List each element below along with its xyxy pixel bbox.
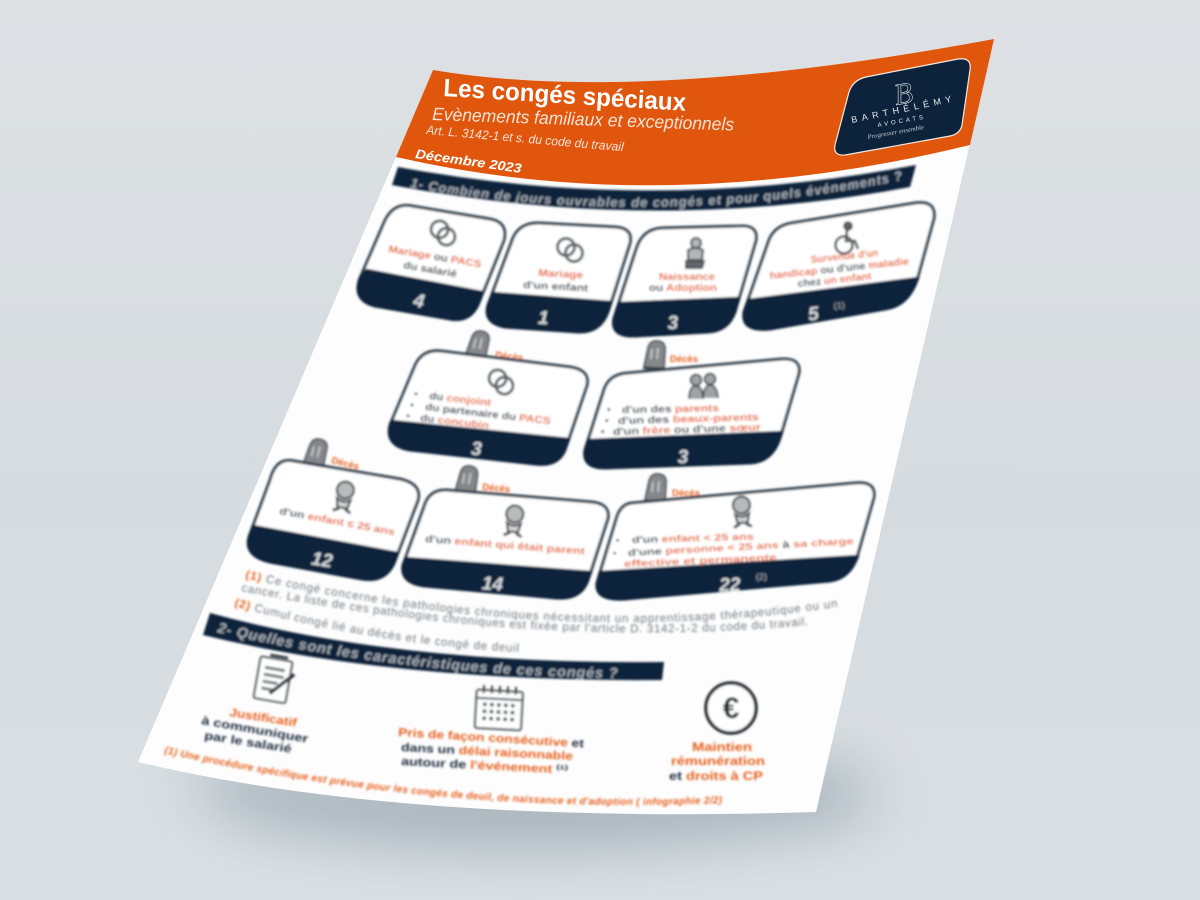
- icon: calendar: [475, 685, 523, 730]
- label: [769, 248, 910, 290]
- logo: BARTHÉLÉMY: [850, 94, 952, 125]
- label: Mariage ou PACS: [388, 244, 482, 271]
- label: du salarié: [402, 260, 458, 280]
- icon: rings: [487, 369, 515, 395]
- days: 3: [667, 313, 679, 334]
- list: d'un des beaux-parents: [618, 412, 760, 427]
- icon: rings: [558, 238, 582, 262]
- page body (soft focus): [162, 164, 938, 808]
- list: du concubin: [420, 413, 489, 432]
- label: handicap ou d'une maladie: [769, 256, 910, 282]
- list: •: [616, 535, 620, 546]
- page sheet: [138, 39, 994, 814]
- text: dans un délai raisonnable: [401, 742, 573, 763]
- icon: tombstone: [302, 437, 329, 469]
- icon: tombstone: [464, 329, 491, 361]
- text: Justificatif: [229, 707, 298, 730]
- list: [613, 532, 854, 570]
- label: Mariage: [538, 268, 584, 281]
- card: décès parents, 3: [585, 341, 799, 468]
- card: décès enfant ou personne à charge, 22: Décès: [672, 488, 700, 499]
- days: 1: [537, 308, 549, 329]
- text: et droits à CP: [669, 771, 763, 783]
- subtitle: Evènements familiaux et exceptionnels: [432, 104, 734, 135]
- days: 5: [807, 303, 820, 326]
- text: rémunération: [671, 756, 765, 768]
- logo: B: [891, 76, 915, 112]
- label: [649, 272, 717, 294]
- label: ou Adoption: [649, 283, 717, 294]
- legal reference: Art. L. 3142-1 et s. du code du travail: [425, 123, 625, 154]
- label: d'un enfant: [523, 280, 589, 294]
- card: naissance ou adoption, 3: [613, 226, 756, 336]
- list: d'une personne < 25 ans à sa charge: [628, 536, 854, 559]
- logo: AVOCATS: [877, 115, 924, 129]
- header: orange banner: [396, 39, 994, 185]
- list: du conjoint: [429, 391, 492, 409]
- days: 12: [310, 549, 334, 573]
- list: du partenaire du PACS: [425, 402, 551, 427]
- prise de congé column: [398, 685, 584, 777]
- card: mariage ou PACS du salarié, 4: [358, 205, 505, 320]
- footnotes: cancer. La liste de ces pathologies chroniques est fixée par l'article D. 3142-1-2 du code du travail.: [240, 584, 808, 634]
- card: décès enfant de moins de 25 ans, 12: [248, 437, 419, 580]
- label: [523, 268, 589, 294]
- list: •: [613, 548, 617, 559]
- card: handicap ou maladie d'un enfant, 5: [744, 203, 934, 329]
- card: décès conjoint, 3: Décès: [495, 350, 524, 364]
- days: 22: [718, 575, 741, 596]
- icon: baby: [686, 238, 704, 268]
- card: décès enfant ou personne à charge, 22: [597, 474, 874, 599]
- days: 4: [411, 290, 426, 313]
- icon: tombstone: [644, 474, 667, 503]
- rémunération column: [669, 683, 765, 783]
- card: décès conjoint, 3: [389, 329, 587, 464]
- text: à communiquer: [200, 715, 310, 746]
- card: décès enfant de moins de 25 ans, 12: Décès: [330, 455, 360, 473]
- label: chez un enfant: [797, 271, 873, 290]
- days: 3: [470, 439, 483, 460]
- list: •: [414, 389, 419, 400]
- icon: child: [333, 480, 356, 513]
- icon: tombstone: [454, 465, 479, 496]
- label: [388, 244, 482, 280]
- list: effective et permanente: [624, 552, 777, 570]
- logo: Progresser ensemble: [866, 124, 925, 141]
- list: [406, 389, 551, 432]
- icon: notepad: [254, 653, 297, 704]
- label: Naissance: [659, 272, 715, 283]
- footer note: (1) Une procédure spécifique est prévue pour les congés de deuil, de naissance et d'adoption ( infographie 2/2): [162, 745, 724, 808]
- list: [601, 403, 761, 438]
- card: décès enfant parent, 14: Décès: [482, 482, 511, 495]
- justificatif column: [200, 653, 310, 756]
- list: d'un enfant < 25 ans: [632, 532, 754, 546]
- text: Pris de façon consécutive et: [398, 727, 584, 750]
- section heading 1: 1- Combien de jours ouvrables de congés et pour quels événements ?: [408, 169, 904, 211]
- list: d'un des parents: [622, 403, 720, 416]
- icon: person: [732, 496, 752, 528]
- footnotes: (2) Cumul congé lié au décès et le congé de deuil.: [206, 472, 550, 677]
- list: •: [605, 416, 609, 427]
- card: handicap ou maladie d'un enfant, 5: (1): [833, 300, 845, 311]
- list: •: [406, 411, 411, 422]
- icon: euro coin: €: [723, 692, 740, 725]
- label: Survenue d'un: [810, 248, 879, 266]
- card: décès enfant ou personne à charge, 22: (2): [756, 571, 767, 582]
- icon: wheelchair: [836, 222, 858, 254]
- list: •: [607, 405, 611, 416]
- list: •: [601, 427, 605, 438]
- days: 14: [481, 573, 504, 596]
- text: [398, 727, 584, 777]
- icon: family: [689, 374, 718, 399]
- footnotes: [206, 472, 838, 677]
- label: d'un enfant ≤ 25 ans: [278, 506, 396, 538]
- page shadow: [190, 760, 870, 840]
- date: Décembre 2023: [415, 146, 523, 176]
- card: décès parents, 3: Décès: [670, 354, 698, 365]
- icon: tombstone: [643, 341, 666, 370]
- text: [200, 707, 310, 756]
- text: Maintien: [692, 742, 752, 754]
- card: décès enfant parent, 14: [403, 465, 608, 598]
- icon: child: [504, 505, 525, 537]
- days: 3: [677, 447, 689, 468]
- footnotes: (1) Ce congé concerne les pathologies chroniques nécessitant un apprentissage thérapeutique ou un: [244, 569, 838, 626]
- section heading 2: 2- Quelles sont les caractéristiques de ces congés ?: [215, 621, 620, 681]
- icon: rings: [429, 220, 457, 246]
- text: [669, 742, 765, 783]
- text: autour de l'événement ⁽¹⁾: [401, 755, 568, 777]
- title: Les congés spéciaux: [443, 74, 687, 117]
- card: mariage d'un enfant, 1: [487, 223, 630, 332]
- list: •: [410, 400, 415, 411]
- text: par le salarié: [204, 730, 292, 756]
- logo: [835, 59, 970, 155]
- label: d'un enfant qui était parent: [425, 534, 586, 558]
- list: d'un frère ou d'une sœur: [613, 422, 761, 438]
